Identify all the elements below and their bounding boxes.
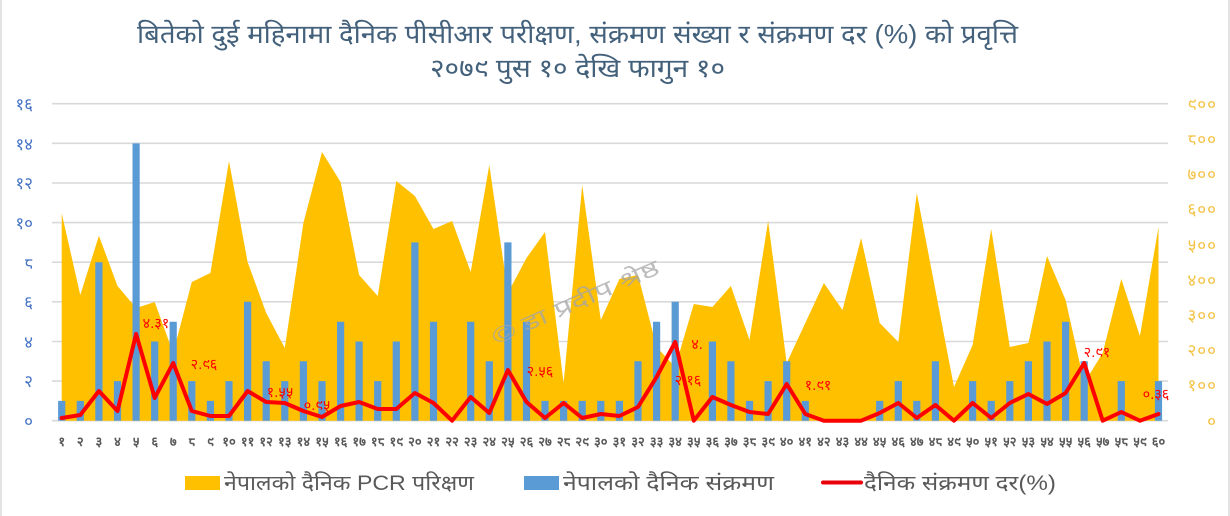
x axis labels: १७: [352, 434, 366, 449]
x axis labels: २६: [520, 434, 533, 449]
x axis labels: ५: [133, 434, 140, 449]
left axis labels: १६: [15, 95, 33, 114]
x axis labels: २१: [427, 434, 440, 449]
x axis labels: ५१: [984, 434, 998, 449]
x axis labels: २२: [445, 434, 459, 449]
rate data labels: २.५६: [527, 364, 553, 380]
legend: [185, 471, 1056, 495]
x axis labels: ८: [188, 434, 195, 449]
right axis labels: ६००: [1187, 200, 1217, 219]
left axis labels: १४: [15, 135, 33, 154]
x axis labels: २०: [408, 434, 422, 449]
x axis labels: [58, 434, 1165, 449]
x axis labels: २९: [575, 434, 589, 449]
right axis labels: ५००: [1187, 236, 1217, 255]
x axis labels: ३: [96, 434, 103, 449]
x axis labels: ३७: [724, 434, 738, 449]
right axis labels: [1187, 95, 1217, 431]
left axis labels: [15, 95, 33, 431]
x axis labels: ४७: [910, 434, 924, 449]
x axis labels: ६: [151, 434, 158, 449]
x axis labels: ३९: [761, 434, 775, 449]
x axis labels: ४५: [873, 434, 887, 449]
x axis labels: ४४: [854, 434, 868, 449]
x axis labels: ३१: [613, 434, 626, 449]
rate data labels: २.९१: [1084, 345, 1110, 361]
right axis labels: ४००: [1187, 271, 1217, 290]
x axis labels: १४: [297, 434, 310, 449]
x axis labels: १९: [390, 434, 403, 449]
x axis labels: ३८: [743, 434, 756, 449]
rate data labels: ०.३६: [1143, 387, 1169, 403]
x axis labels: ९: [207, 434, 214, 449]
rate data labels: १.९१: [805, 378, 831, 394]
legend: infections: नेपालको दैनिक संक्रमण: [563, 471, 775, 495]
x axis labels: ७: [170, 434, 177, 449]
x axis labels: ४: [114, 434, 121, 449]
right axis labels: १००: [1187, 376, 1217, 395]
legend: infection rate: दैनिक संक्रमण दर(%): [864, 471, 1056, 495]
title: बितेको दुई महिनामा दैनिक पीसीआर परीक्षण, संक्रमण संख्या र संक्रमण दर (%) को प्रवृत्ति: [137, 19, 1019, 51]
x axis labels: १३: [278, 434, 292, 449]
x axis labels: ३५: [687, 434, 701, 449]
x axis labels: ५२: [1003, 434, 1017, 449]
x axis labels: २३: [464, 434, 478, 449]
x axis labels: ५७: [1096, 434, 1110, 449]
x axis labels: १०: [222, 434, 236, 449]
rate data labels: २.९६: [191, 357, 217, 373]
left axis labels: ०: [24, 412, 33, 431]
left axis labels: १०: [15, 214, 33, 233]
x axis labels: ३२: [631, 434, 645, 449]
right axis labels: ९००: [1187, 95, 1217, 114]
x axis labels: ६०: [1152, 434, 1165, 449]
bar series: daily infections: [58, 143, 1162, 421]
x axis labels: ५५: [1059, 434, 1073, 449]
title: २०७९ पुस १० देखि फागुन १०: [430, 53, 725, 84]
x axis labels: २८: [557, 434, 571, 449]
x axis labels: ४८: [929, 434, 942, 449]
x axis labels: ५३: [1022, 434, 1035, 449]
x axis labels: १८: [371, 434, 385, 449]
x axis labels: ४१: [799, 434, 812, 449]
x axis labels: २५: [501, 434, 515, 449]
x axis labels: ५८: [1115, 434, 1128, 449]
x axis labels: ४२: [817, 434, 831, 449]
right axis labels: ०: [1207, 412, 1217, 431]
left axis labels: १२: [15, 174, 33, 193]
x axis labels: ११: [241, 434, 254, 449]
left axis labels: ४: [24, 333, 33, 352]
rate data labels: ४.: [691, 337, 703, 353]
x axis labels: ४६: [892, 434, 905, 449]
x axis labels: ४९: [947, 434, 961, 449]
x axis labels: २४: [483, 434, 496, 449]
rate data labels: २.१६: [675, 373, 701, 389]
right axis labels: ३००: [1187, 306, 1217, 325]
x axis labels: १: [58, 434, 65, 449]
right axis labels: ८००: [1187, 130, 1217, 149]
x axis labels: ३०: [594, 434, 608, 449]
rate data labels: [143, 316, 1169, 414]
x axis labels: २७: [538, 434, 552, 449]
x axis labels: ४३: [836, 434, 849, 449]
x axis labels: ५०: [966, 434, 980, 449]
legend: infections: [524, 471, 775, 495]
x axis labels: १६: [334, 434, 348, 449]
x axis labels: १२: [259, 434, 273, 449]
rate data labels: ०.९५: [304, 398, 330, 414]
x axis labels: १५: [315, 434, 329, 449]
line series: daily infection rate: [62, 334, 1159, 421]
watermark: © डा प्रदीप श्रेष्ठ: [488, 254, 664, 350]
legend: PCR tests: नेपालको दैनिक PCR परिक्षण: [224, 471, 475, 495]
x axis labels: २: [77, 434, 84, 449]
x axis labels: ३६: [706, 434, 719, 449]
left axis labels: ८: [24, 254, 33, 273]
area series: daily PCR tests: [62, 152, 1159, 421]
x axis labels: ५९: [1133, 434, 1147, 449]
x axis labels: ३३: [650, 434, 664, 449]
x axis labels: ३४: [668, 434, 682, 449]
right axis labels: २००: [1187, 341, 1217, 360]
rate data labels: ४.३१: [143, 316, 169, 332]
left axis labels: २: [24, 372, 33, 391]
right axis labels: ७००: [1187, 165, 1217, 184]
x axis labels: ५६: [1077, 434, 1091, 449]
title: [137, 19, 1019, 84]
left axis labels: ६: [24, 293, 33, 312]
x axis labels: ५४: [1040, 434, 1054, 449]
rate data labels: १.५५: [267, 385, 293, 401]
x axis labels: ४०: [780, 434, 794, 449]
